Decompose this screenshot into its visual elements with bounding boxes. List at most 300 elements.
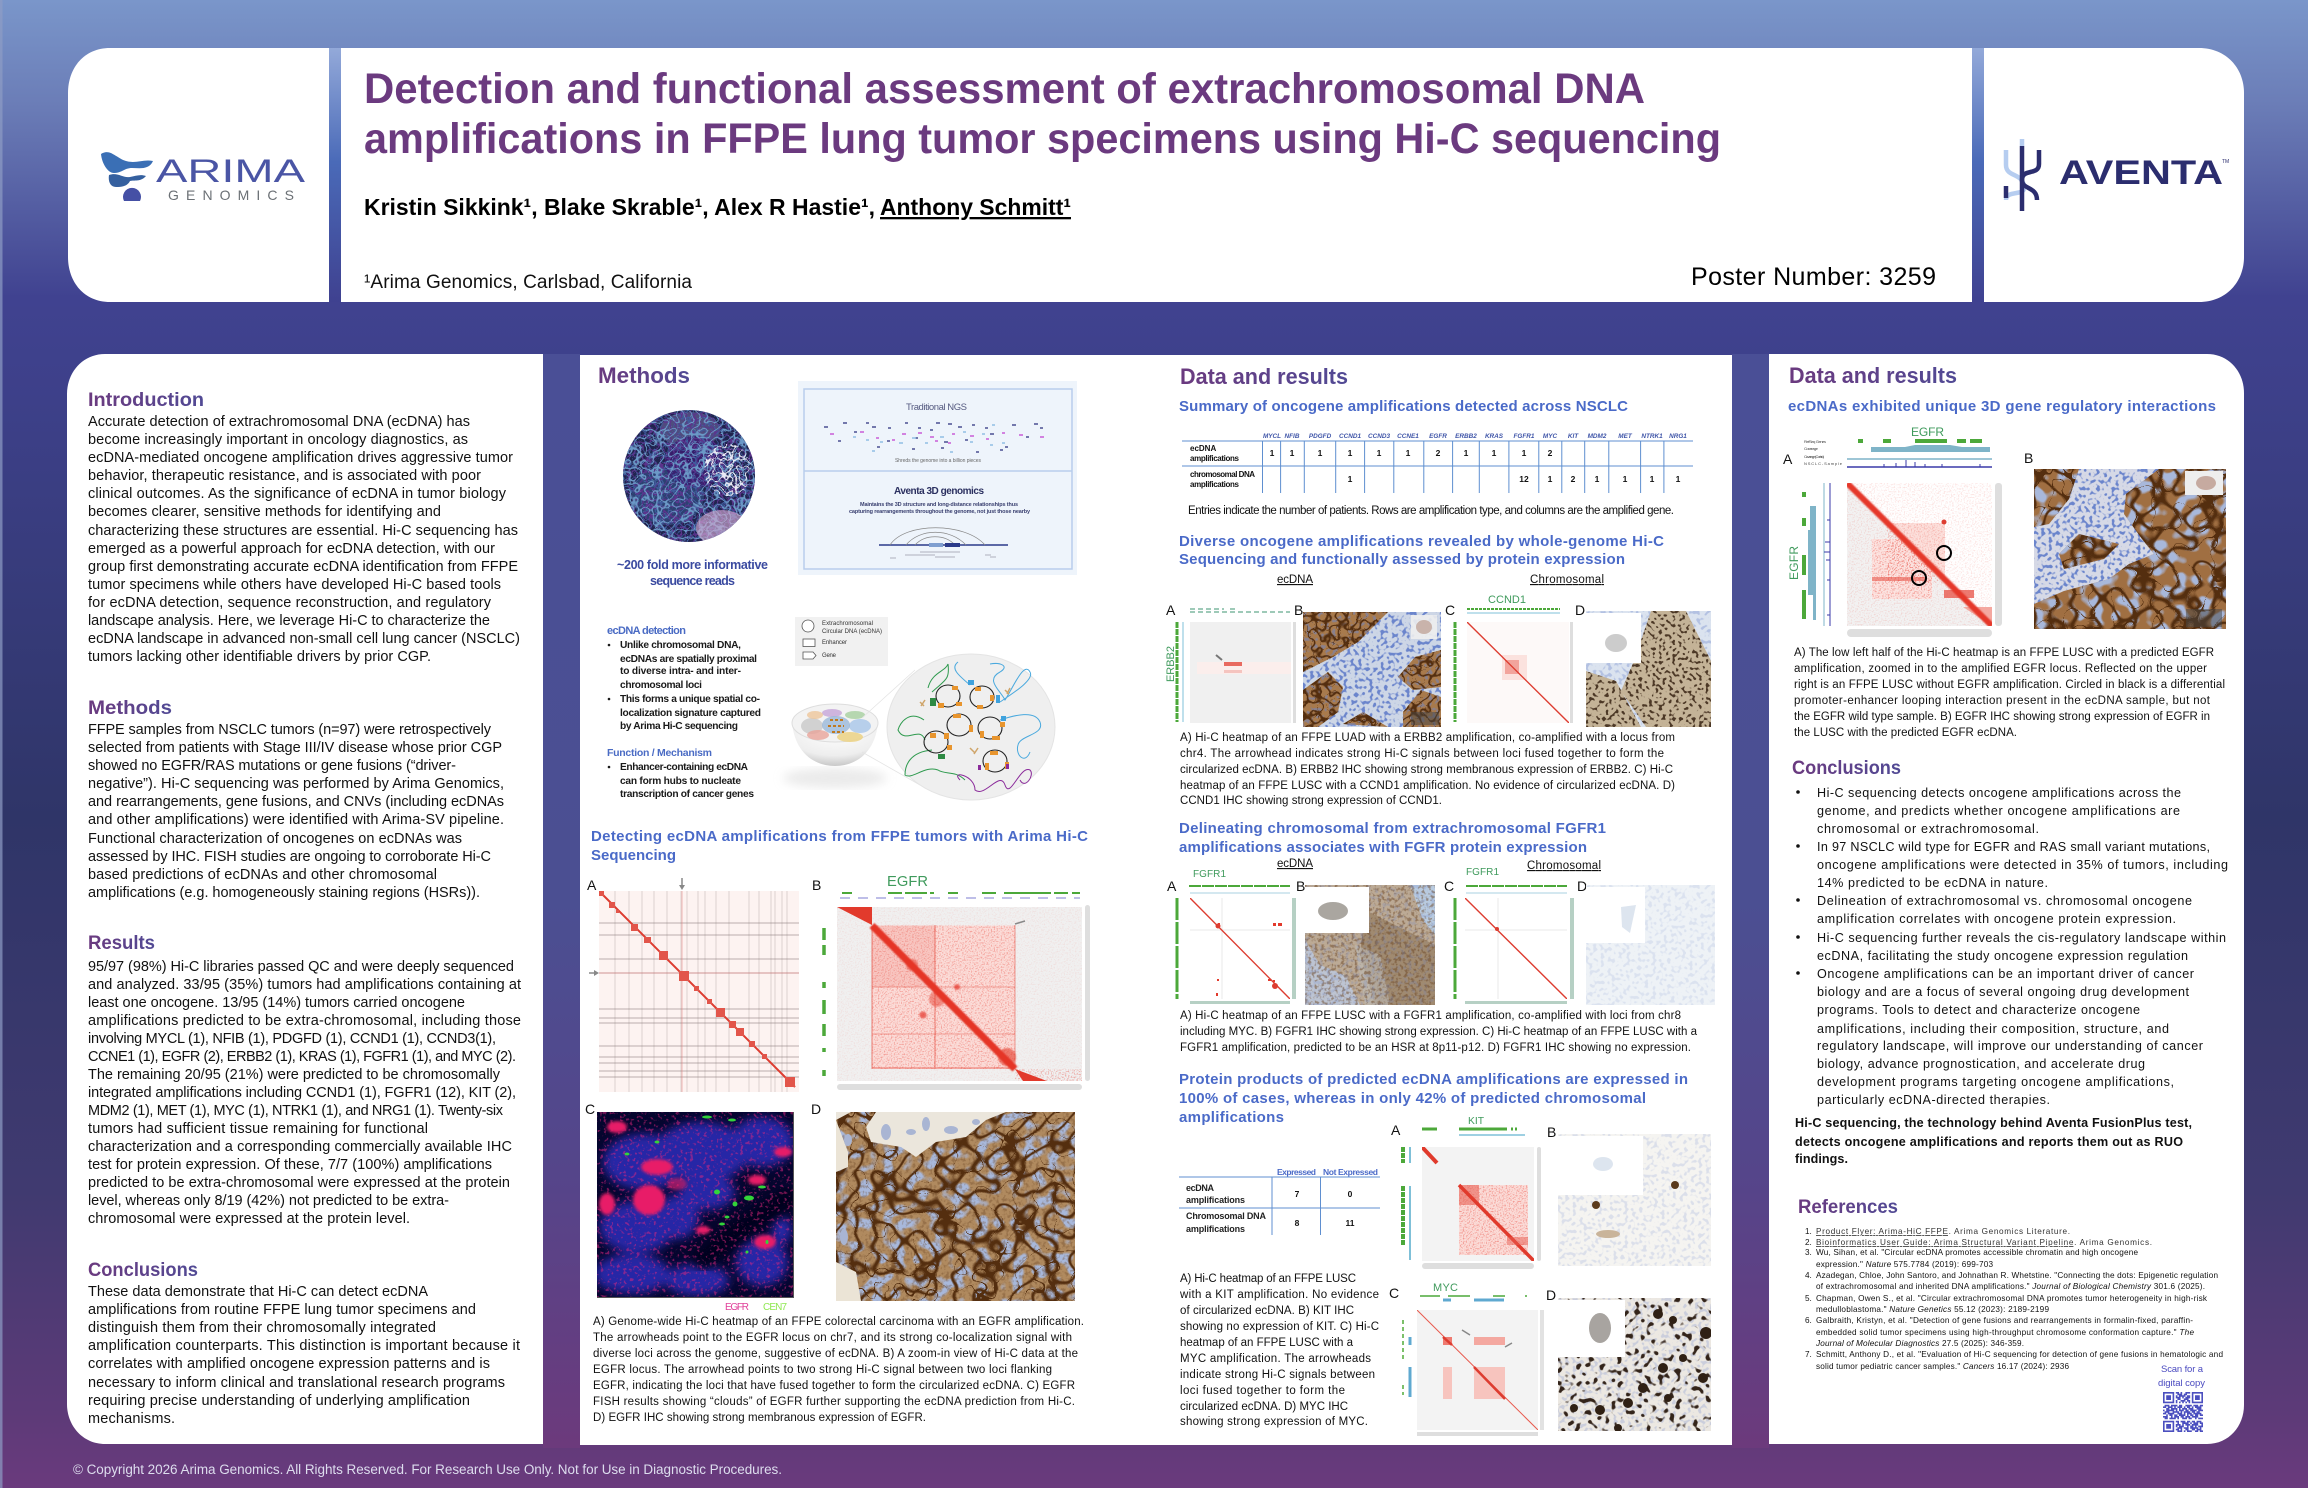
text: methods body: selected from patients with Stage III/IV disease whose prior CGP [88, 740, 502, 756]
chart: FGFR1 chromosomal heatmap: FGFR1 [1466, 867, 1499, 878]
list: references: Schmitt, Anthony D., et al. "Evaluation of Hi-C sequencing for detection of gene fusions in hematologic and [1816, 1350, 2223, 1359]
panel: left column text [67, 354, 543, 1444]
header dividers [329, 48, 1984, 302]
text: introduction body: characterizing these structures are essential. Hi-C sequencing has [88, 523, 518, 539]
chart: FGFR1 ecDNA heatmap: FGFR1 [1193, 869, 1226, 880]
text: results body: integrated amplifications including CCND1 (1), FGFR1 (12), KIT (2), [88, 1085, 516, 1101]
heading: detecting ecDNA: Sequencing [591, 847, 676, 864]
image: CCND1 IHC [1575, 602, 1711, 727]
heading: protein products [1179, 1071, 1688, 1126]
image: FGFR1 IHC strong [1296, 878, 1435, 1005]
caption: FGFR1: A) Hi-C heatmap of an FFPE LUSC with a FGFR1 amplification, co-amplified with loci from chr8 [1180, 1010, 1681, 1022]
text: methods body: assessed by IHC. FISH studies are ongoing to corroborate Hi-C [88, 849, 491, 865]
text: conclusions body: amplification counterparts. This distinction is important because it [88, 1338, 520, 1354]
caption: protein products: loci fused together to form the [1180, 1385, 1345, 1397]
list: references: medulloblastoma." Nature Genetics 55.12 (2023): 2189-2199 [1816, 1305, 2049, 1314]
table: oncogene amplifications: KRAS [1485, 433, 1504, 440]
table: oncogene amplifications: CCND1 [1339, 433, 1361, 440]
title [364, 66, 1721, 163]
table: oncogene amplifications: 1 [1348, 448, 1353, 458]
text: results body: involving MYCL (1), NFIB (1), PDGFD (1), CCND1 (1), CCND3(1), [88, 1031, 496, 1047]
table: oncogene amplifications: amplifications [1190, 480, 1240, 489]
text: conclusions body [88, 1284, 520, 1427]
authors: Kristin Sikkink¹, Blake Skrable¹, Alex R Hastie¹, [364, 194, 875, 220]
table: oncogene amplifications: NTRK1 [1641, 433, 1663, 440]
text: results body: MDM2 (1), MET (1), MYC (1), NTRK1 (1), and NRG1 (1). Twenty-six [88, 1103, 504, 1119]
chart: ERBB2 Hi-C heatmap [1165, 602, 1296, 723]
chart: MYC Hi-C heatmap: MYC [1433, 1282, 1458, 1294]
chart: EGFR Hi-C comparison heatmap: EGFR [1911, 425, 1944, 439]
list: references: Galbraith, Kristyn, et al. "Detection of gene fusions and rearrangements in formalin-fixed, paraffin- [1816, 1316, 2193, 1325]
chart: KIT Hi-C heatmap [1391, 1116, 1541, 1269]
heading: delineating FGFR1: amplifications associates with FGFR protein expression [1179, 839, 1587, 856]
table: oncogene amplifications: 1 [1595, 474, 1600, 484]
table: oncogene amplifications: CCND3 [1368, 433, 1390, 440]
list: references: Wu, Sihan, et al. "Circular ecDNA promotes accessible chromatin and high oncogene [1816, 1248, 2138, 1257]
illustration: ecDNA hub circle [862, 654, 1055, 800]
heading: Data and results: Data and results [1789, 363, 1957, 388]
text: results body: test for protein expression. Of these, 7/7 (100%) amplifications [88, 1157, 492, 1173]
heading: detecting ecDNA: Detecting ecDNA amplifications from FFPE tumors with Arima Hi-C [591, 828, 1088, 845]
text: introduction body: ecDNA landscape in advanced non-small cell lung cancer (NSCLC) [88, 631, 520, 647]
caption: diverse oncogene [1180, 732, 1675, 807]
table: oncogene amplifications: 1 [1318, 448, 1323, 458]
chart: EGFR Hi-C comparison heatmap: RefSeq Genes [1804, 439, 1826, 444]
panel: center methods and results [580, 355, 1732, 1445]
chart: CCND1 Hi-C heatmap: CCND1 [1488, 594, 1526, 606]
table: expression by amplification type: amplifications [1186, 1224, 1245, 1234]
callout: fold more informative [617, 558, 768, 588]
table: expression by amplification type [1179, 1167, 1380, 1235]
list: conclusions bullets: Hi-C sequencing further reveals the cis-regulatory landscape within [1817, 931, 2226, 945]
text: methods body [88, 722, 504, 901]
caption: protein products: indicate strong Hi-C signals between [1180, 1369, 1375, 1381]
table: expression by amplification type: Expressed [1277, 1167, 1316, 1177]
caption: diverse oncogene: A) Hi-C heatmap of an FFPE LUAD with a ERBB2 amplification, co-amplified with a locus from [1180, 732, 1675, 744]
list: references: Bioinformatics User Guide: Arima Structural Variant Pipeline. Arima Genomics. [1816, 1238, 2152, 1247]
table: oncogene amplifications: MYCL [1263, 433, 1281, 440]
chart: EGFR Hi-C comparison heatmap [1783, 425, 2002, 637]
text: introduction body: Accurate detection of extrachromosomal DNA (ecDNA) has [88, 414, 470, 430]
column labels: ecDNA [1277, 574, 1313, 586]
chart: ERBB2 Hi-C heatmap: A [1166, 602, 1176, 618]
table: oncogene amplifications: NRG1 [1669, 433, 1687, 440]
chart: ERBB2 Hi-C heatmap: ERBB2 [1165, 646, 1177, 682]
caption: EGFR: promoter-enhancer looping interaction present in the ecDNA sample, but not [1794, 695, 2211, 707]
table: expression by amplification type: Chromosomal DNA [1186, 1211, 1266, 1221]
text: methods body: FFPE samples from NSCLC tumors (n=97) were retrospectively [88, 722, 492, 738]
table: expression by amplification type: amplifications [1186, 1195, 1245, 1205]
image: ERBB2 IHC [1294, 602, 1441, 727]
callout: Aventa FusionPlus: findings. [1795, 1152, 1848, 1166]
list: conclusions bullets: development programs targeting oncogene amplifications, [1817, 1075, 2174, 1089]
caption: protein products: circularized ecDNA. D) MYC IHC [1180, 1401, 1348, 1413]
chart: EGFR Hi-C comparison heatmap: Coverage [1804, 446, 1819, 451]
legend: ecDNA symbols: Extrachromosomal [822, 621, 873, 627]
table: oncogene amplifications: 1 [1492, 448, 1497, 458]
list: conclusions bullets: Oncogene amplifications can be an important driver of cancer [1817, 967, 2194, 981]
text: introduction body: ecDNA-mediated oncogene amplification drives aggressive tumor [88, 450, 513, 466]
text: methods body: showed no EGFR/RAS mutations or gene fusions (“driver- [88, 758, 456, 774]
chart: zoomed Hi-C heatmap B [812, 874, 1090, 1090]
heading: Data and results: Data and results [1180, 364, 1348, 389]
list: references: 6. [1805, 1316, 1812, 1325]
table: expression by amplification type: 11 [1346, 1218, 1355, 1228]
illustration: cell bowl [783, 704, 887, 788]
text: ecDNA detection: Unlike chromosomal DNA, [620, 640, 741, 651]
chart: FGFR1 ecDNA heatmap [1167, 869, 1296, 1004]
chart: EGFR Hi-C comparison heatmap: NSCLC-Sample [1804, 461, 1843, 466]
list: conclusions bullets: biology and are a focus of several ongoing drug development [1817, 985, 2190, 999]
list: references: 1. [1805, 1227, 1812, 1236]
panel: header right logo [1984, 48, 2244, 302]
caption: FGFR1: FGFR1 amplification, predicted to be an HSR at 8p11-p12. D) FGFR1 IHC showing no expression. [1180, 1042, 1691, 1054]
chart: CCND1 Hi-C heatmap [1445, 594, 1573, 723]
caption: diverse oncogene: CCND1 IHC showing strong expression of CCND1. [1180, 795, 1442, 807]
heading: Methods: Methods [88, 697, 172, 719]
list: references: of extrachromosomal and inherited DNA amplifications." Journal of Biological Chemistry 301.6 (2025). [1816, 1282, 2205, 1291]
illustration: chromatin ball [620, 408, 760, 546]
caption: EGFR: the LUSC with the predicted EGFR ecDNA. [1794, 727, 2017, 739]
table: oncogene amplifications: 1 [1522, 448, 1527, 458]
text: results body: amplifications predicted to be extra-chromosomal, including those [88, 1013, 521, 1029]
callout: fold more informative: sequence reads [650, 574, 735, 588]
image: KIT IHC [1547, 1124, 1711, 1266]
caption: protein products: A) Hi-C heatmap of an FFPE LUSC [1180, 1273, 1356, 1285]
logo: Arima Genomics: ARIMA [156, 153, 306, 189]
list: conclusions bullets: 14% predicted to be ecDNA in nature. [1817, 876, 2048, 890]
chart: MYC Hi-C heatmap: C [1389, 1285, 1399, 1301]
text: results body: CCNE1 (1), EGFR (2), ERBB2 (1), KRAS (1), FGFR1 (1), and MYC (2). [88, 1049, 516, 1065]
list: references: 3. [1805, 1248, 1812, 1257]
table: oncogene amplifications: 1 [1377, 448, 1382, 458]
heading: Methods: Methods [598, 363, 690, 388]
table: expression by amplification type: 7 [1295, 1189, 1300, 1199]
list: conclusions bullets: ecDNA, facilitating the study oncogene expression regulation [1817, 949, 2188, 963]
text: conclusions body: These data demonstrate that Hi-C can detect ecDNA [88, 1284, 428, 1300]
list: references: 4. [1805, 1271, 1812, 1280]
image: EGFR IHC panel D [811, 1101, 1075, 1301]
table: oncogene amplifications: 2 [1548, 448, 1553, 458]
heading: summary of oncogene amplifications: Summary of oncogene amplifications detected across NSCLC [1179, 398, 1628, 415]
text: results body: chromosomal were expressed at the protein level. [88, 1211, 410, 1227]
text: ecDNA detection [607, 625, 761, 732]
icon: QR code [2163, 1393, 2203, 1431]
text: introduction body: behavior, therapeutic resistance, and is associated with poor [88, 468, 481, 484]
chart: genome-wide Hi-C heatmap A [587, 877, 799, 1092]
text: conclusions body: requiring precise understanding of underlying amplification [88, 1393, 470, 1409]
table: oncogene amplifications: MDM2 [1588, 433, 1607, 440]
caption: diverse oncogene: circularized ecDNA. B) ERBB2 IHC showing strong membranous expression of ERBB2. C) Hi-C [1180, 764, 1673, 776]
column labels [1277, 858, 1601, 872]
list: conclusions bullets: amplifications, including their composition, structure, and [1817, 1022, 2169, 1036]
chart: FGFR1 ecDNA heatmap: A [1167, 878, 1177, 894]
table: oncogene amplifications: 2 [1436, 448, 1441, 458]
table: oncogene amplifications: 1 [1290, 448, 1295, 458]
logo: Aventa: TM [2222, 159, 2229, 165]
heading: Conclusions: Conclusions [88, 1259, 198, 1281]
image: FISH panel C: CEN7 [763, 1302, 787, 1313]
table: oncogene amplifications: 1 [1676, 474, 1681, 484]
logo: Aventa: AVENTA [2059, 154, 2223, 192]
diagram: Traditional NGS vs Aventa 3D: Traditional NGS [906, 402, 967, 413]
logo: Arima Genomics: GENOMICS [168, 187, 294, 203]
image: FGFR1 IHC none: D [1577, 878, 1587, 894]
caption: diverse oncogene: heatmap of an FFPE LUSC with a CCND1 amplification. No evidence of circularized ecDNA. D) [1180, 780, 1675, 792]
table: oncogene amplifications [1182, 433, 1693, 493]
image: EGFR IHC [2024, 450, 2226, 629]
caption: EGFR: the EGFR wild type sample. B) EGFR IHC showing strong expression of EGFR in [1794, 711, 2210, 723]
chart: EGFR Hi-C comparison heatmap: A [1783, 451, 1793, 467]
text: conclusions body: necessary to inform clinical and translational research programs [88, 1375, 505, 1391]
list: conclusions bullets: amplification correlates with oncogene protein expression. [1817, 912, 2176, 926]
caption: EGFR [1794, 647, 2225, 739]
list: references: 5. [1805, 1294, 1812, 1303]
text: introduction body: landscape analysis. Here, we leverage Hi-C to characterize the [88, 613, 490, 629]
text: results body: The remaining 20/95 (21%) were predicted to be chromosomally [88, 1067, 501, 1083]
table: oncogene amplifications: 1 [1623, 474, 1628, 484]
heading: delineating FGFR1 [1179, 820, 1606, 856]
list: conclusions bullets: Hi-C sequencing detects oncogene amplifications across the [1817, 786, 2181, 800]
list: references: Azadegan, Chloe, John Santoro, and Johnathan R. Whetstine. "Connecting the dots: Epigenetic regulation [1816, 1271, 2218, 1280]
list: references: Chapman, Owen S., et al. "Circular extrachromosomal DNA promotes tumor heterogeneity in high-risk [1816, 1294, 2208, 1303]
image: ERBB2 IHC: B [1294, 602, 1303, 618]
text: function and mechanism: Enhancer-containing ecDNA [620, 762, 749, 773]
heading: protein products: amplifications [1179, 1109, 1284, 1126]
image: FISH panel C: EGFR [725, 1302, 749, 1313]
diagram: Traditional NGS vs Aventa 3D: Shreds the genome into a billion pieces [895, 458, 982, 464]
table: oncogene amplifications: ERBB2 [1455, 433, 1477, 440]
caption: protein products: showing strong expression of MYC. [1180, 1416, 1368, 1428]
text: ecDNA detection: chromosomal loci [620, 680, 702, 691]
text: methods body: amplifications (e.g. homogeneously staining regions (HSRs)). [88, 885, 480, 901]
heading: diverse oncogene amplifications [1179, 533, 1664, 568]
label: scan for a digital copy [2158, 1364, 2205, 1389]
heading: delineating FGFR1: Delineating chromosomal from extrachromosomal FGFR1 [1179, 820, 1606, 837]
diagram: Traditional NGS vs Aventa 3D: capturing rearrangements throughout the genome, not just those nearby [849, 509, 1031, 515]
image: MYC IHC: D [1546, 1287, 1556, 1303]
heading: Introduction: Introduction [88, 389, 204, 411]
text: conclusions body: distinguish them from their chromosomally integrated [88, 1320, 436, 1336]
caption: detecting ecDNA: diverse loci across the genome, suggestive of ecDNA. B) A zoom-in view of Hi-C data at the [593, 1348, 1078, 1360]
list: conclusions bullets: biology, advance prognostication, and accelerate drug [1817, 1057, 2145, 1071]
curves [898, 662, 1041, 791]
column labels: Chromosomal [1527, 860, 1601, 872]
heading: References: References [1798, 1196, 1898, 1218]
table: oncogene amplifications: 1 [1548, 474, 1553, 484]
table: oncogene amplifications: MYC [1543, 433, 1557, 440]
list: conclusions bullets [1796, 786, 2228, 1107]
chart: FGFR1 chromosomal heatmap: C [1444, 878, 1454, 894]
table: oncogene amplifications: amplifications [1190, 454, 1240, 463]
caption: detecting ecDNA: FISH results showing “clouds” of EGFR further supporting the ecDNA prediction from Hi-C. [593, 1396, 1075, 1408]
table: oncogene amplifications: 1 [1464, 448, 1469, 458]
caption: FGFR1 [1180, 1010, 1698, 1054]
list: references: 7. [1805, 1350, 1812, 1359]
text: ecDNA detection: ecDNAs are spatially proximal [620, 654, 757, 665]
chart: EGFR Hi-C comparison heatmap: Coverage (Control) [1804, 454, 1825, 459]
list: references: Product Flyer: Arima-HiC FFPE. Arima Genomics Literature. [1816, 1227, 2070, 1236]
chart: CCND1 Hi-C heatmap: C [1445, 602, 1455, 618]
poster number: Poster Number: 3259 [1691, 263, 1936, 291]
caption: EGFR: amplification, zoomed in to the amplified EGFR locus. Reflected on the upper [1794, 663, 2207, 675]
table: oncogene amplifications: ecDNA [1190, 444, 1216, 453]
table: oncogene amplifications: MET [1618, 433, 1633, 440]
column labels: ecDNA [1277, 858, 1313, 870]
image: FGFR1 IHC strong: B [1296, 878, 1305, 894]
caption: detecting ecDNA: EGFR, indicating the loci that have fused together to form the circularized ecDNA. C) EGFR [593, 1380, 1075, 1392]
table: oncogene amplifications: 12 [1519, 474, 1529, 484]
caption: FGFR1: including MYC. B) FGFR1 IHC showing strong expression. C) Hi-C heatmap of an FFPE LUSC with a [1180, 1026, 1698, 1038]
panel: header left logo [68, 48, 329, 302]
list: conclusions bullets: oncogene amplifications were detected in 35% of tumors, including [1817, 858, 2228, 872]
heading: protein products: 100% of cases, whereas in only 42% of predicted chromosomal [1179, 1090, 1646, 1107]
callout: Aventa FusionPlus: detects oncogene amplifications and reports them out as RUO [1795, 1135, 2183, 1149]
footer: copyright: © Copyright 2026 Arima Genomics. All Rights Reserved. For Research Use Only. Not for Use in Diagnostic Procedures. [73, 1462, 782, 1477]
chart: FGFR1 chromosomal heatmap [1444, 867, 1574, 1004]
text: introduction body: emerged as a powerful approach for ecDNA detection, with our [88, 541, 495, 557]
text: results body: characterization and a corresponding commercially available IHC [88, 1139, 512, 1155]
text: introduction body: tumors lacking other identifiable drivers by prior CGP. [88, 649, 431, 665]
column labels: Chromosomal [1530, 574, 1604, 586]
text: introduction body: tumor specimens while others have developed Hi-C based tools [88, 577, 501, 593]
rings [924, 685, 1007, 772]
heading: protein products: Protein products of predicted ecDNA amplifications are expressed in [1179, 1071, 1688, 1088]
list: conclusions bullets: regulatory landscape, will improve our understanding of cancer [1817, 1039, 2203, 1053]
chart: KIT Hi-C heatmap: A [1391, 1122, 1401, 1138]
logo: Arima Genomics [101, 152, 306, 203]
note: table entries: Entries indicate the number of patients. Rows are amplification type, and columns are the amplified gene. [1188, 505, 1674, 517]
table: oncogene amplifications: 1 [1348, 474, 1353, 484]
text: results body: 95/97 (98%) Hi-C libraries passed QC and were deeply sequenced [88, 959, 514, 975]
legend: ecDNA symbols [795, 617, 888, 666]
table: oncogene amplifications: KIT [1568, 433, 1579, 440]
text: results body [88, 959, 521, 1227]
list: references: solid tumor pediatric cancer samples." Cancers 16.17 (2024): 2936 [1816, 1362, 2069, 1371]
diagram: Traditional NGS vs Aventa 3D [798, 381, 1077, 575]
table: oncogene amplifications: 2 [1571, 474, 1576, 484]
caption: detecting ecDNA [593, 1316, 1084, 1424]
text: function and mechanism: Function / Mechanism [607, 747, 712, 759]
text: conclusions body: mechanisms. [88, 1411, 175, 1427]
image: FISH panel C [585, 1101, 794, 1313]
affiliation: ¹Arima Genomics, Carlsbad, California [364, 272, 692, 293]
text: function and mechanism: can form hubs to nucleate [620, 776, 741, 787]
text: results body: predicted to be extra-chromosomal were expressed at the protein [88, 1175, 510, 1191]
diagram: Traditional NGS vs Aventa 3D: Maintains the 3D structure and long-distance relationships thus [860, 502, 1018, 508]
image: FGFR1 IHC none [1577, 878, 1715, 1005]
caption: detecting ecDNA: A) Genome-wide Hi-C heatmap of an FFPE colorectal carcinoma with an EGFR amplification. [593, 1316, 1084, 1328]
heading: ecDNAs 3D regulatory: ecDNAs exhibited unique 3D gene regulatory interactions [1788, 398, 2216, 415]
list: references: expression." Nature 575.7784 (2019): 699-703 [1816, 1260, 1993, 1269]
list: references [1805, 1227, 2223, 1371]
legend: ecDNA symbols: Gene [822, 653, 837, 659]
heading: Conclusions: Conclusions [1792, 757, 1901, 779]
text: introduction body: group first demonstrating accurate ecDNA identification from FFPE [88, 559, 518, 575]
list: references: 2. [1805, 1238, 1812, 1247]
heading: Results: Results [88, 932, 155, 954]
caption: diverse oncogene: chr4. The arrowhead indicates strong Hi-C signals between loci fused together to form the [1180, 748, 1664, 760]
table: oncogene amplifications: 1 [1406, 448, 1411, 458]
panel: header title block [341, 48, 1972, 302]
diagram: Traditional NGS vs Aventa 3D: Aventa 3D genomics [894, 486, 984, 497]
caption: detecting ecDNA: The arrowheads point to the EGFR locus on chr7, and its strong co-localization signal with [593, 1332, 1072, 1344]
text: results body: level, whereas only 8/19 (42%) not predicted to be extra- [88, 1193, 449, 1209]
text: ecDNA detection: ecDNA detection [607, 625, 686, 637]
legend: ecDNA symbols: Enhancer [822, 640, 847, 646]
text: ecDNA detection: localization signature captured [620, 708, 761, 719]
text: results body: least one oncogene. 13/95 (14%) tumors carried oncogene [88, 995, 465, 1011]
text: introduction body [88, 414, 520, 665]
text: results body: tumors had sufficient tissue remaining for functional [88, 1121, 428, 1137]
legend: ecDNA symbols: Circular DNA (ecDNA) [822, 629, 882, 635]
text: methods body: Functional characterization of oncogenes on ecDNAs was [88, 831, 462, 847]
logo: Aventa [2006, 139, 2229, 211]
title: amplifications in FFPE lung tumor specimens using Hi-C sequencing [364, 116, 1721, 163]
table: expression by amplification type: Not Expressed [1323, 1167, 1378, 1177]
text: introduction body: for ecDNA detection, sequence reconstruction, and regulatory [88, 595, 492, 611]
list: conclusions bullets: genome, and predicts whether oncogene amplifications are [1817, 804, 2180, 818]
callout: fold more informative: ~200 fold more informative [617, 558, 768, 572]
table: expression by amplification type: 0 [1348, 1189, 1353, 1199]
text: conclusions body: amplifications from routine FFPE lung tumor specimens and [88, 1302, 476, 1318]
text: results body: and analyzed. 33/95 (35%) tumors had amplifications containing at [88, 977, 521, 993]
list: conclusions bullets: chromosomal or extrachromosomal. [1817, 822, 2039, 836]
caption: protein products: with a KIT amplification. No evidence [1179, 1289, 1379, 1301]
callout: Aventa FusionPlus [1795, 1116, 2192, 1166]
text: methods body: negative”). Hi-C sequencing was performed by Arima Genomics, [88, 776, 504, 792]
table: expression by amplification type: 8 [1295, 1218, 1300, 1228]
text: methods body: and other amplifications) were identified with Arima-SV pipeline. [88, 812, 504, 828]
caption: EGFR: A) The low left half of the Hi-C heatmap is an FFPE LUSC with a predicted EGFR [1794, 647, 2214, 659]
text: methods body: based predictions of ecDNAs and other chromosomal [88, 867, 437, 883]
caption: protein products: heatmap of an FFPE LUSC with a [1180, 1337, 1354, 1349]
table: oncogene amplifications: chromosomal DNA [1190, 470, 1255, 479]
label: scan for a digital copy: Scan for a [2161, 1364, 2204, 1375]
chart: KIT Hi-C heatmap: KIT [1468, 1116, 1485, 1127]
image: CCND1 IHC: D [1575, 602, 1585, 618]
image: FISH panel C: C [585, 1101, 595, 1117]
list: references: embedded solid tumor specimens using high-throughput chromosome conformation capture." The [1816, 1328, 2194, 1337]
caption: protein products: of circularized ecDNA. B) KIT IHC [1180, 1305, 1354, 1317]
chart: zoomed Hi-C heatmap B: B [812, 877, 821, 893]
text: function and mechanism [607, 747, 754, 800]
text: function and mechanism: transcription of cancer genes [620, 789, 754, 800]
table: oncogene amplifications: FGFR1 [1514, 433, 1535, 440]
text: methods body: and rearrangements, gene fusions, and CNVs (including ecDNAs [88, 794, 504, 810]
text: introduction body: clinical outcomes. As the significance of ecDNA in tumor biology [88, 486, 507, 502]
chart: zoomed Hi-C heatmap B: EGFR [887, 874, 928, 890]
list: conclusions bullets: Delineation of extrachromosomal vs. chromosomal oncogene [1817, 894, 2192, 908]
caption: protein products: MYC amplification. The arrowheads [1180, 1353, 1371, 1365]
table: oncogene amplifications: NFIB [1285, 433, 1300, 440]
list: conclusions bullets: programs. Tools to detect and characterize oncogene [1817, 1003, 2140, 1017]
image: MYC IHC [1546, 1287, 1712, 1432]
text: introduction body: become increasingly important in oncology diagnostics, as [88, 432, 468, 448]
list: references: Journal of Molecular Diagnostics 27.5 (2025): 346-359. [1815, 1339, 2024, 1348]
text: conclusions body: correlates with amplified oncogene expression patterns and is [88, 1356, 490, 1372]
text: ecDNA detection: This forms a unique spatial co- [620, 694, 760, 705]
table: oncogene amplifications: CCNE1 [1397, 433, 1419, 440]
title: Detection and functional assessment of extrachromosomal DNA [364, 66, 1645, 113]
panel: right column [1769, 354, 2244, 1444]
image: EGFR IHC panel D: D [811, 1101, 821, 1117]
caption: EGFR: right is an FFPE LUSC without EGFR amplification. Circled in black is a differential [1794, 679, 2225, 691]
table: oncogene amplifications: 1 [1270, 448, 1275, 458]
caption: detecting ecDNA: D) EGFR IHC showing strong membranous expression of EGFR. [593, 1412, 926, 1424]
label: scan for a digital copy: digital copy [2158, 1378, 2205, 1389]
callout: Aventa FusionPlus: Hi-C sequencing, the technology behind Aventa FusionPlus test, [1795, 1116, 2192, 1130]
